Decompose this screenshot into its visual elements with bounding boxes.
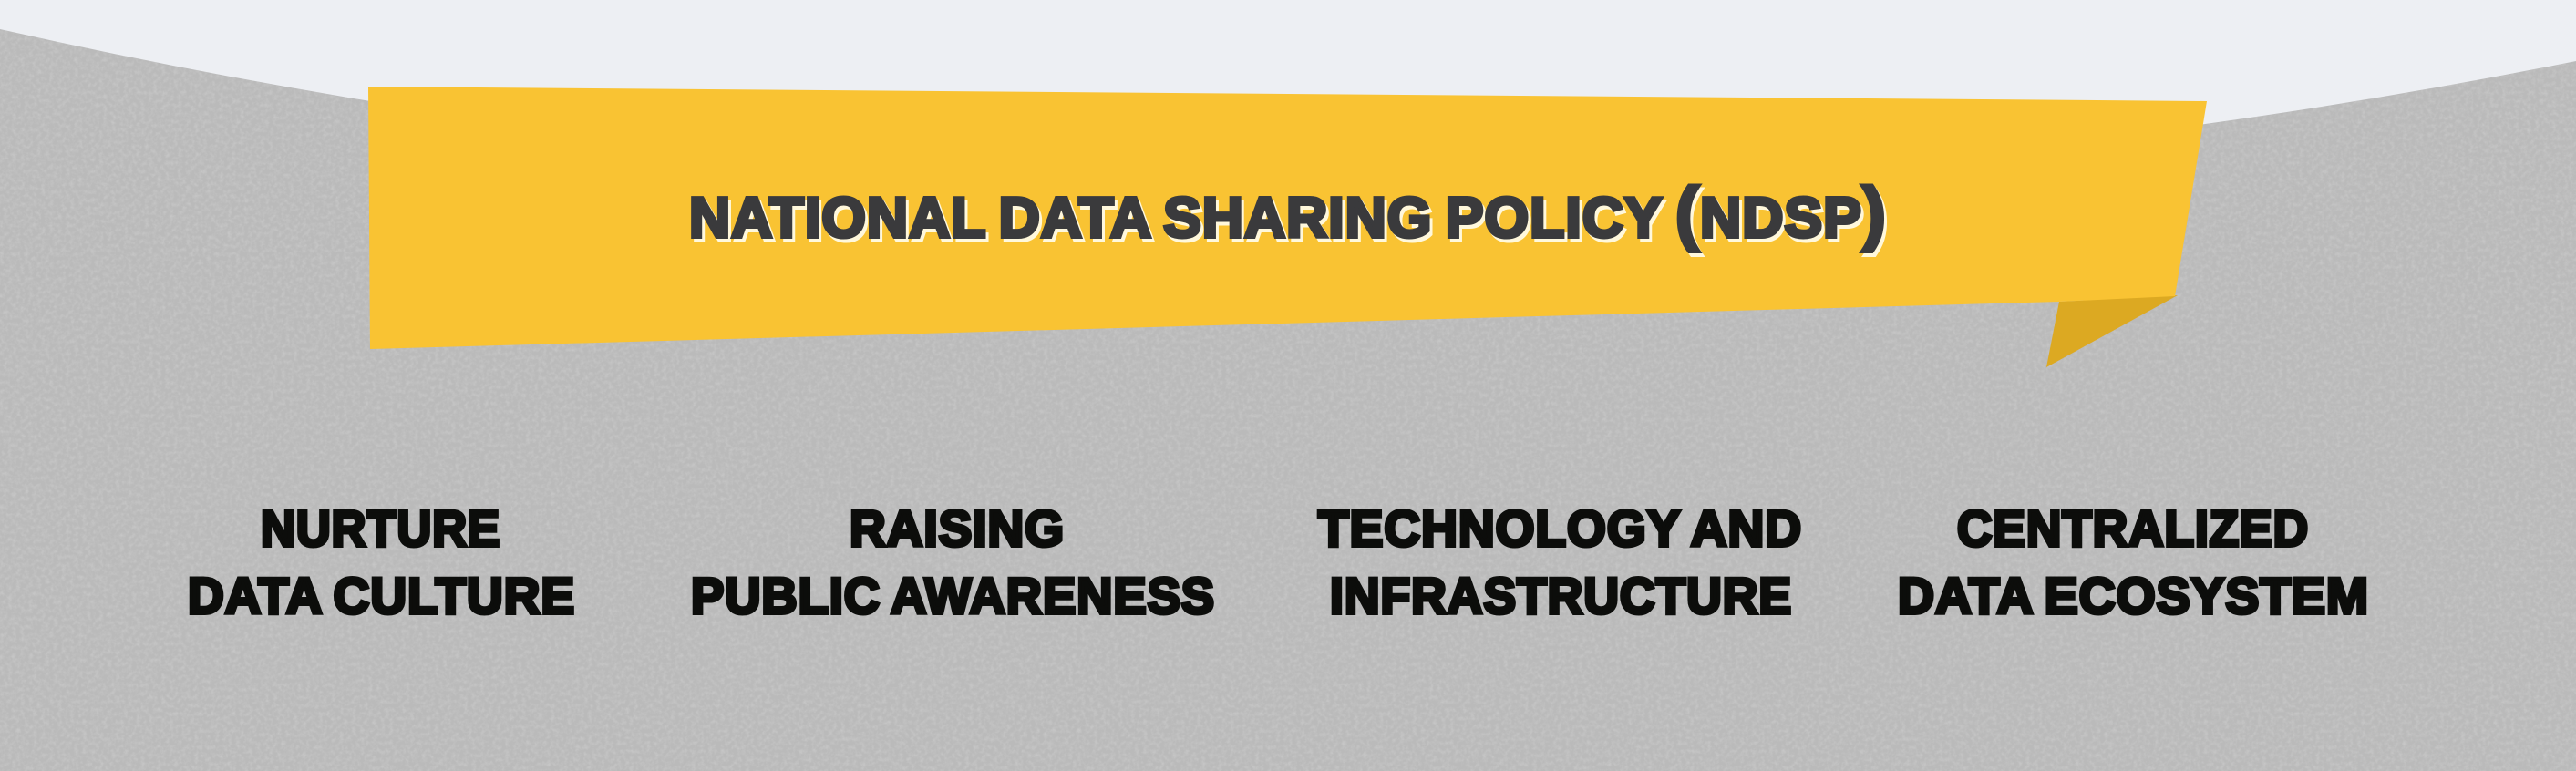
label: nurture data culture [188,499,575,624]
line 1: TECHNOLOGY AND [1318,499,1802,557]
ribbon body [368,87,2207,349]
ribbon fold [2046,295,2178,367]
banner: title ribbon [368,87,2207,367]
line 2: PUBLIC AWARENESS [691,567,1215,624]
line 2: DATA ECOSYSTEM [1898,567,2369,624]
title: NATIONAL DATA SHARING POLICY (NDSP) [689,172,1887,252]
line 1: RAISING [850,499,1065,557]
label: centralized data ecosystem [1898,499,2369,624]
line 2: DATA CULTURE [188,567,575,624]
line 1: CENTRALIZED [1957,499,2309,557]
line 1: NURTURE [261,499,500,557]
label: technology and infrastructure [1318,499,1802,624]
label: raising public awareness [691,499,1215,624]
line 2: INFRASTRUCTURE [1330,567,1792,624]
